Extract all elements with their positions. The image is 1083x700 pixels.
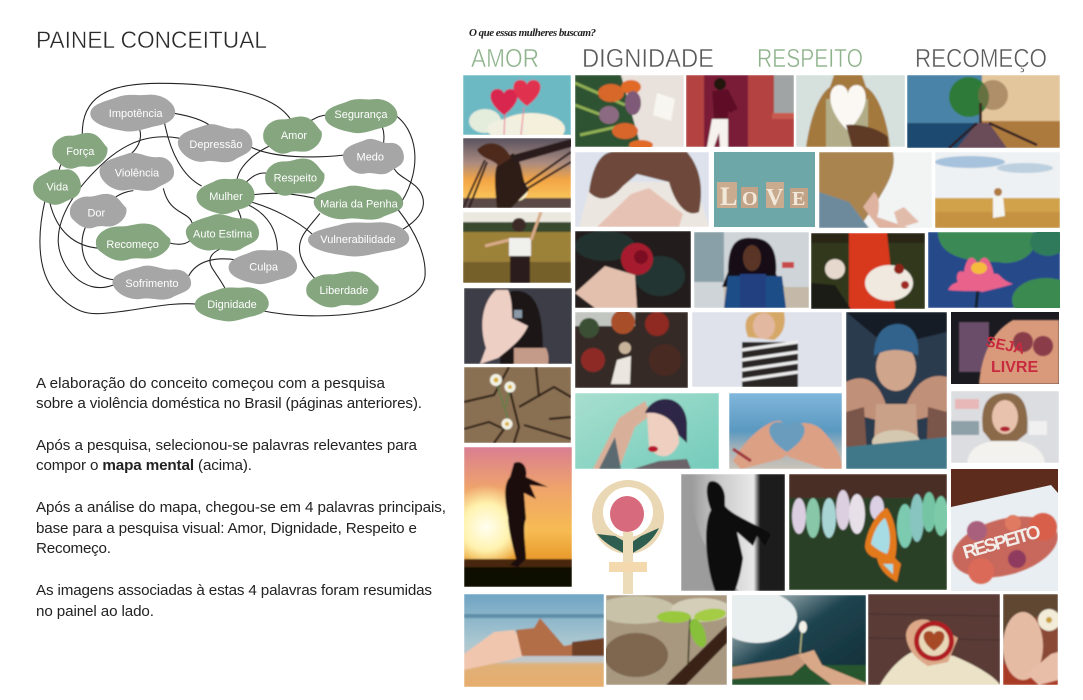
photo: silhouette at sunset xyxy=(464,447,572,587)
keyword headings: DIGNIDADE xyxy=(582,43,714,73)
photo: baby with patterned cap xyxy=(846,312,947,469)
node: Vida xyxy=(33,169,81,205)
node: Vulnerabilidade xyxy=(308,222,409,256)
photo: red dress and white bouquet xyxy=(811,233,925,309)
photo: woman in blue on street xyxy=(694,232,809,308)
node: Recomeço xyxy=(96,224,170,261)
photo: tulips bouquet xyxy=(575,75,684,147)
body text: As imagens associadas à estas 4 palavras foram resumidas xyxy=(36,582,432,599)
photo: hands forming a heart xyxy=(729,393,842,469)
node: Impotência: Impotência xyxy=(109,108,163,120)
photo: RESPEITO floral lettering: RESPEITO xyxy=(961,522,1043,564)
node: Auto Estima xyxy=(186,214,259,251)
node: Dor xyxy=(70,194,127,228)
body text: base para a pesquisa visual: Amor, Dignidade, Respeito e xyxy=(36,520,417,537)
body text: Após a análise do mapa, chegou-se em 4 palavras principais, xyxy=(36,499,446,516)
keyword headings: RECOMEÇO xyxy=(915,43,1047,73)
photo: girl in golden field xyxy=(463,212,571,283)
node: Liberdade: Liberdade xyxy=(320,285,368,297)
photo: LOVE wooden blocks: E xyxy=(792,188,805,210)
node: Sofrimento: Sofrimento xyxy=(125,278,179,290)
node: Dor: Dor xyxy=(87,208,106,220)
photo: LOVE wooden blocks xyxy=(714,152,815,227)
photo: LOVE wooden blocks: O xyxy=(742,188,758,210)
body text xyxy=(36,375,446,620)
photo: green sprout in crack xyxy=(606,595,727,685)
body text: compor o mapa mental (acima). xyxy=(36,457,252,474)
photo: back with SEJA LIVRE xyxy=(951,312,1059,384)
photo: woman in striped shirt xyxy=(692,312,842,387)
body text: Recomeço. xyxy=(36,540,111,557)
photo: woman applying lipstick xyxy=(951,391,1059,463)
node: Vulnerabilidade: Vulnerabilidade xyxy=(320,234,396,246)
photo: woman raising hand xyxy=(464,288,572,364)
photo: hands on chest with long hair xyxy=(575,152,709,227)
node: Dignidade: Dignidade xyxy=(207,299,257,311)
node: Amor: Amor xyxy=(281,130,307,142)
node: Violência xyxy=(100,153,174,191)
node: Segurança: Segurança xyxy=(334,109,388,121)
photo: back with SEJA LIVRE: SEJA xyxy=(984,333,1026,358)
photo: hands passing white flower xyxy=(732,595,866,685)
node: Amor xyxy=(263,117,322,154)
photo: daisies in cracked earth xyxy=(464,367,571,443)
node: Impotência xyxy=(90,95,175,132)
photo: two hands on the beach xyxy=(464,594,604,687)
node: Vida: Vida xyxy=(46,182,69,194)
node: Liberdade xyxy=(306,272,379,307)
photo: heart latte in sweater hands xyxy=(868,594,1000,685)
photo: half green half dry tree over pier xyxy=(907,75,1060,148)
photo: RESPEITO floral lettering xyxy=(951,469,1058,591)
photo: butterfly and chrysalises xyxy=(789,474,947,590)
photo: woman by red brick wall xyxy=(686,75,794,147)
photo: back with SEJA LIVRE: LIVRE xyxy=(991,359,1038,376)
body text: Após a pesquisa, selecionou-se palavras relevantes para xyxy=(36,437,418,454)
photo: woman in wheat field xyxy=(935,152,1060,228)
node: Culpa: Culpa xyxy=(249,262,279,274)
title: PAINEL CONCEITUAL xyxy=(36,27,267,54)
photo: woman in greenhouse xyxy=(575,312,688,388)
photo: hands holding red rose xyxy=(575,231,691,308)
keyword headings: RESPEITO xyxy=(757,43,863,73)
photo: red heart balloons xyxy=(463,75,571,135)
node: Medo: Medo xyxy=(357,152,384,164)
mind map xyxy=(33,83,425,321)
body text: no painel ao lado. xyxy=(36,603,154,620)
node: Recomeço: Recomeço xyxy=(106,239,159,251)
node: Mulher: Mulher xyxy=(209,191,243,203)
panel subtitle: O que essas mulheres buscam? xyxy=(469,27,596,39)
photo: blonde woman in window light xyxy=(819,152,932,228)
body text: A elaboração do conceito começou com a pesquisa xyxy=(36,375,386,392)
node: Auto Estima: Auto Estima xyxy=(193,229,253,241)
photo: woman with white flower xyxy=(1003,594,1058,685)
node: Respeito: Respeito xyxy=(274,173,317,185)
node: Maria da Penha: Maria da Penha xyxy=(320,199,399,211)
node: Força: Força xyxy=(66,146,95,158)
photo: pregnant silhouette by curtain xyxy=(681,474,785,591)
map connections xyxy=(40,83,425,316)
node: Sofrimento xyxy=(112,266,191,300)
node: Violência: Violência xyxy=(115,168,160,180)
photo: LOVE wooden blocks: V xyxy=(766,185,784,211)
photo: woman on swing at sunset xyxy=(463,138,571,208)
keyword headings xyxy=(471,43,1047,73)
node: Mulher xyxy=(197,179,255,214)
node: Culpa xyxy=(229,250,297,284)
node: Depressão xyxy=(178,124,252,162)
body text: sobre a violência doméstica no Brasil (páginas anteriores). xyxy=(36,395,422,412)
node: Medo xyxy=(343,139,404,174)
node: Depressão: Depressão xyxy=(189,139,243,151)
node: Força xyxy=(52,133,108,169)
photo: woman in Rosie the Riveter pose xyxy=(575,393,719,469)
node: Dignidade xyxy=(195,287,269,321)
photo: hand holding paper heart xyxy=(796,75,905,147)
photo: feminist symbol with fist xyxy=(592,480,664,594)
keyword headings: AMOR xyxy=(471,43,539,73)
photo: LOVE wooden blocks: L xyxy=(720,182,737,211)
node: Maria da Penha xyxy=(314,186,403,220)
node: Segurança xyxy=(325,99,397,133)
photo: pink lotus flower xyxy=(928,232,1060,308)
node: Respeito xyxy=(265,159,325,196)
